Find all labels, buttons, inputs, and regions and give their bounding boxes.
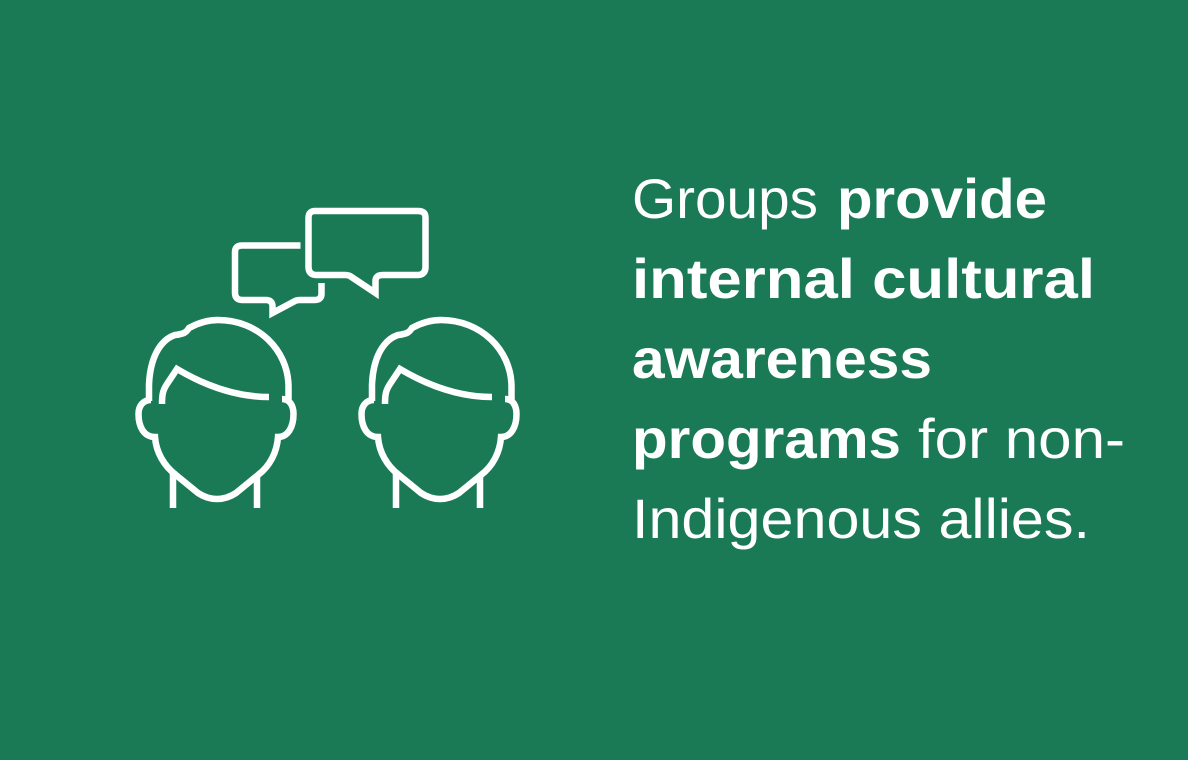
icon: small speech bubble [235,246,322,313]
icon: left head [138,320,294,508]
icon: right head [362,320,516,508]
text block: message [632,167,1125,550]
icon: large speech bubble [308,211,426,293]
icon: two people talking [138,211,516,508]
text block: message: internal cultural [632,247,1095,310]
text block: message: Indigenous allies. [632,487,1090,550]
text block: message: programs [632,407,901,470]
text block: message: Groups [632,167,818,230]
text block: message: for non- [918,407,1125,470]
text block: message: provide [837,167,1047,230]
text block: message: awareness [632,327,932,390]
